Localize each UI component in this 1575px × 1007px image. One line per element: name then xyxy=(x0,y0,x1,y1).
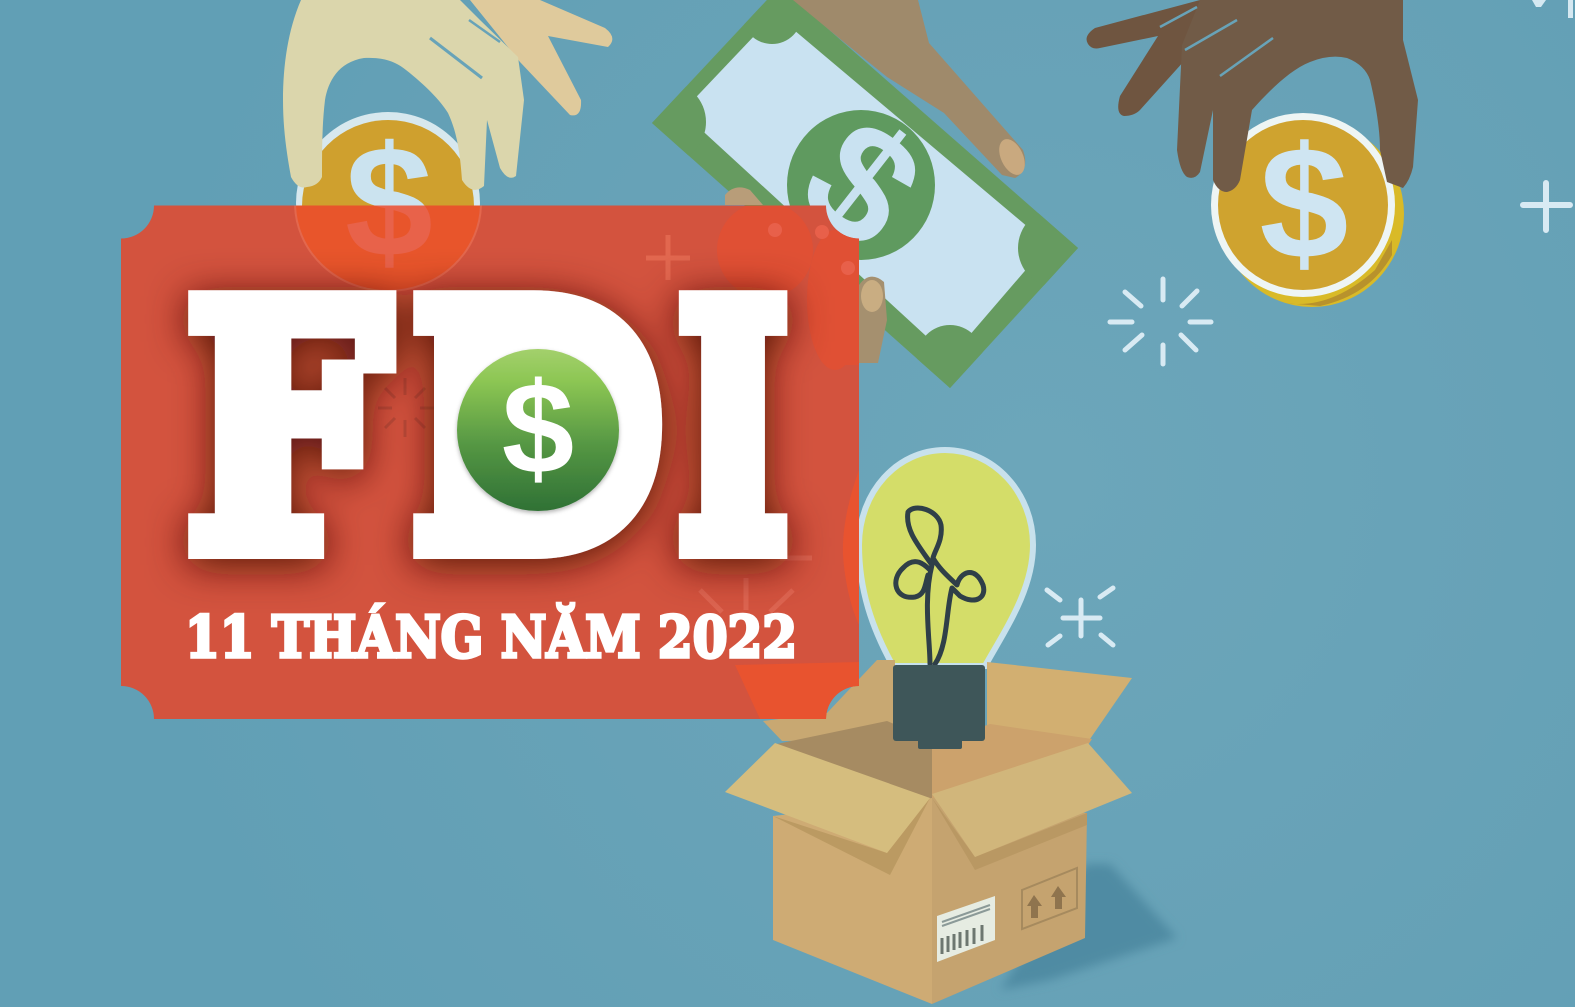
banknote dollar medallion: $ xyxy=(769,83,955,284)
title FDI: D xyxy=(411,233,663,625)
right hand xyxy=(1177,0,1418,192)
stacked coin edge xyxy=(1220,121,1404,307)
icon: box shadow xyxy=(1000,864,1177,990)
right hand fingers xyxy=(1087,0,1200,116)
title FDI: F xyxy=(186,233,389,625)
ghost: coin behind panel xyxy=(294,206,482,292)
ghost: coin behind panel: $ xyxy=(345,114,433,290)
icon: left hand with coin xyxy=(283,0,612,294)
right coin xyxy=(1211,113,1395,297)
icon: banknote xyxy=(652,0,1078,388)
left hand outer fingers xyxy=(470,0,612,115)
icon: sparkle burst xyxy=(1110,279,1211,364)
panel: red title ticket xyxy=(121,206,859,719)
icon: light bulb with plant xyxy=(859,450,1033,666)
icon: small sparkle near bulb xyxy=(1047,588,1113,645)
icon: arm holding banknote xyxy=(725,0,1030,363)
ghost: burst lower right xyxy=(700,558,812,612)
icon: right hand with coin xyxy=(1087,0,1418,307)
box faces xyxy=(773,798,932,1004)
handling stamp xyxy=(1022,868,1077,929)
ghost: bulb edge xyxy=(843,470,859,625)
right coin: $ xyxy=(1260,113,1348,292)
ghost: plus sparkle xyxy=(646,235,690,280)
front flaps xyxy=(725,743,930,853)
left coin: $ xyxy=(345,114,433,290)
left coin xyxy=(296,112,480,294)
plant xyxy=(896,508,984,664)
icon: cardboard box xyxy=(725,660,1132,1004)
flap shadows xyxy=(773,798,930,875)
shipping label xyxy=(937,896,995,962)
icon: green dollar coin: $ xyxy=(502,355,574,501)
ghost: box flap xyxy=(735,662,859,719)
ghost: burst behind letters xyxy=(378,378,435,437)
icon: sparkles top right corner xyxy=(1532,0,1573,18)
back flaps xyxy=(987,662,1132,740)
box interior xyxy=(772,721,932,802)
letter D solid fill xyxy=(434,330,625,520)
title FDI: I xyxy=(677,233,789,625)
icon: green dollar coin xyxy=(457,349,619,511)
ghost: banknote and fingers behind panel xyxy=(717,202,863,370)
icon: lamp base xyxy=(893,665,985,749)
lower fingers xyxy=(725,187,763,205)
subtitle: 11 THÁNG NĂM 2022 xyxy=(185,602,797,671)
left hand palm xyxy=(283,0,524,190)
icon: plus sparkle xyxy=(1523,183,1570,230)
title FDI xyxy=(186,233,789,625)
